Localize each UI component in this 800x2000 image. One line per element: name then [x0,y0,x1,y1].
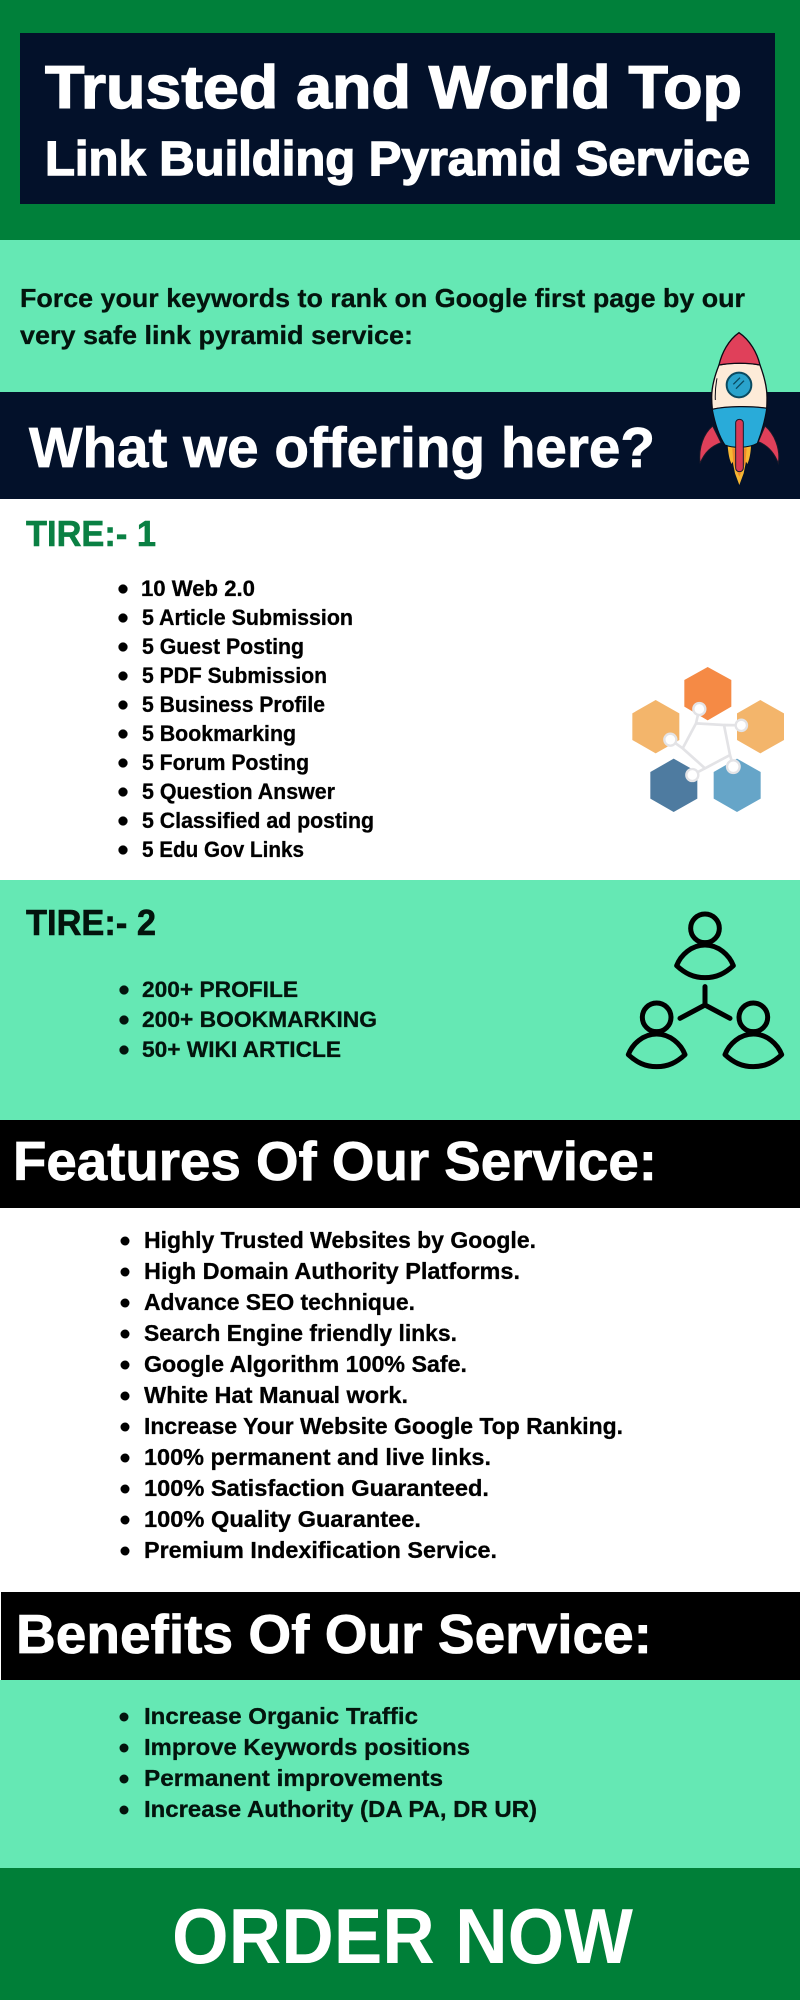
panel: features list: 100% permanent and live links. [144,1444,491,1470]
panel: tier 1 [0,499,800,880]
list: tier 2 items: 50+ WIKI ARTICLE [142,1037,341,1062]
panel: features list: Highly Trusted Websites by Google. [144,1227,536,1253]
list: tier 1 items [118,576,374,862]
list: tier 2 items [120,977,377,1062]
list: tier 2 items: 200+ BOOKMARKING [142,1007,377,1032]
list: tier 1 items: 5 Forum Posting [142,750,309,775]
panel: tier 2 [0,880,800,1120]
heading: benefits: Benefits Of Our Service: [16,1603,652,1665]
title line 1: Trusted and World Top [45,54,742,121]
panel: benefits list: Increase Authority (DA PA, DR UR) [144,1796,537,1822]
panel: features heading band [0,1120,800,1208]
panel: features list: Premium Indexification Service. [144,1537,497,1563]
panel: intro [0,240,800,392]
list: tier 1 items: 5 Edu Gov Links [142,837,304,862]
panel: title header [0,0,800,240]
panel: order now [0,1868,800,2000]
heading: tire 1: TIRE:- 1 [26,513,156,554]
list: tier 1 items: 5 Business Profile [142,692,325,717]
icon: hexagon network [632,667,784,812]
panel: features list: High Domain Authority Platforms. [144,1258,520,1284]
panel: benefits list [0,1680,800,1868]
panel: features list: Search Engine friendly links. [144,1320,457,1346]
icon: people network [628,914,782,1067]
panel: features list: Increase Your Website Google Top Ranking. [144,1413,623,1439]
list: tier 1 items: 5 PDF Submission [142,663,327,688]
panel: benefits list: Improve Keywords positions [144,1734,470,1760]
panel: features list: 100% Quality Guarantee. [144,1506,421,1532]
intro text line 2: very safe link pyramid service: [20,320,413,350]
call to action text: ORDER NOW [172,1892,633,1980]
panel: offering heading band [0,392,800,499]
panel: features list: White Hat Manual work. [144,1382,408,1408]
list: tier 1 items: 5 Bookmarking [142,721,296,746]
panel: features list [0,1208,800,1592]
heading: features: Features Of Our Service: [13,1130,657,1192]
panel: features list: Google Algorithm 100% Safe. [144,1351,467,1377]
list: tier 1 items: 5 Article Submission [142,605,353,630]
list: tier 1 items: 10 Web 2.0 [141,576,255,601]
list: tier 2 items: 200+ PROFILE [142,977,298,1002]
list: tier 1 items: 5 Guest Posting [142,634,304,659]
panel: benefits list: Increase Organic Traffic [144,1703,418,1729]
icon: rocket [700,333,779,485]
list: tier 1 items: 5 Question Answer [142,779,335,804]
panel: benefits heading band [1,1592,800,1680]
panel: features list: 100% Satisfaction Guaranteed. [144,1475,489,1501]
heading: tire 2: TIRE:- 2 [26,902,156,943]
list: tier 1 items: 5 Classified ad posting [142,808,374,833]
intro text line 1: Force your keywords to rank on Google first page by our [20,283,745,313]
panel: features list: Advance SEO technique. [144,1289,415,1315]
heading: what we offering: What we offering here? [29,416,655,480]
title line 2: Link Building Pyramid Service [45,133,750,186]
panel: benefits list: Permanent improvements [144,1765,443,1791]
